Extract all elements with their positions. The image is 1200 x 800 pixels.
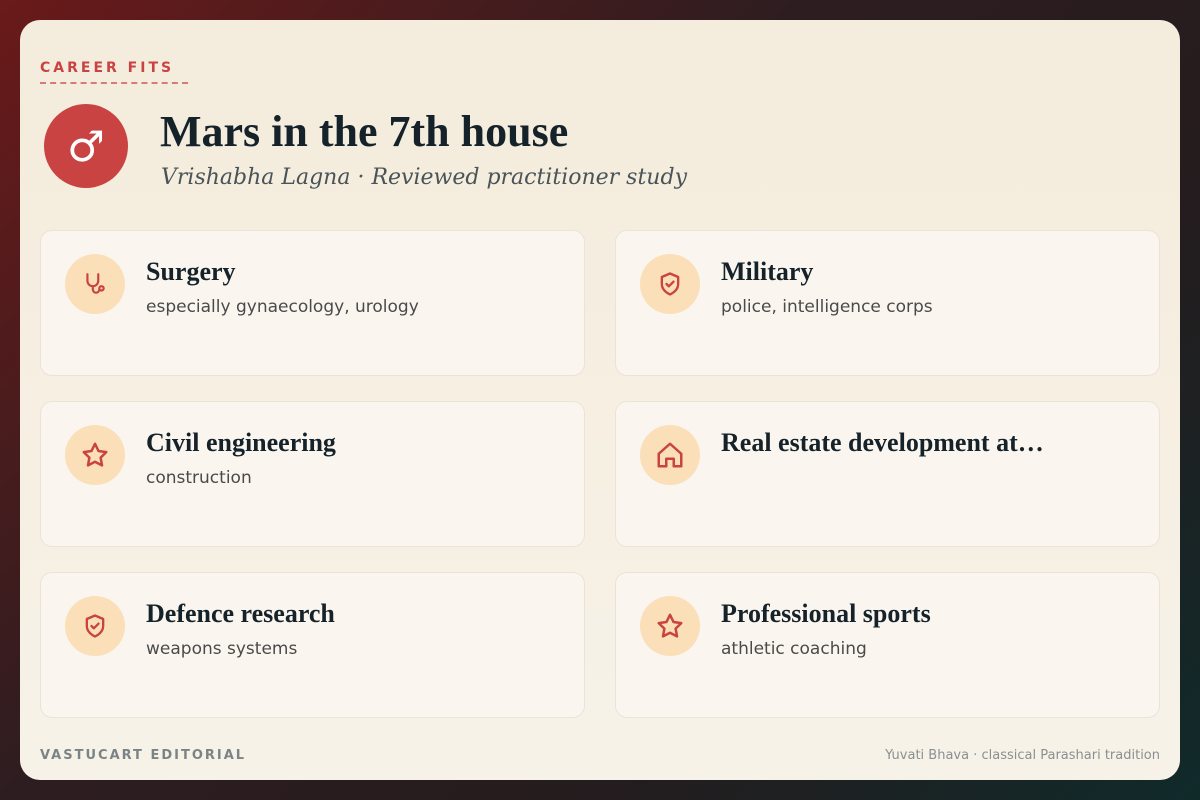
panel: professional sports: [615, 572, 1160, 718]
panel: defence research: Defence research: [146, 599, 335, 628]
panel: civil engineering: Civil engineering: [146, 428, 336, 457]
panel: military: police, intelligence corps: [721, 297, 933, 317]
panel: military: Military: [721, 257, 813, 286]
footer right: Yuvati Bhava · classical Parashari tradition: [885, 748, 1160, 763]
panel: surgery: [40, 230, 585, 376]
title: Mars in the 7th house: [160, 107, 568, 156]
icon: star: [640, 596, 700, 656]
panel: surgery: especially gynaecology, urology: [146, 297, 419, 317]
eyebrow label: [40, 60, 188, 84]
panel: defence research: weapons systems: [146, 639, 297, 659]
icon: house: [640, 425, 700, 485]
icon: shield: [640, 254, 700, 314]
panel: surgery: Surgery: [146, 257, 236, 286]
panel: civil engineering: construction: [146, 468, 252, 488]
footer left: VASTUCART EDITORIAL: [40, 748, 246, 763]
icon: stethoscope: [65, 254, 125, 314]
icon: mars symbol: ♂: [67, 122, 105, 170]
eyebrow label: CAREER FITS: [40, 60, 174, 76]
panel: professional sports: Professional sports: [721, 599, 931, 628]
icon: shield: [65, 596, 125, 656]
icon: star: [65, 425, 125, 485]
panel: real estate: [615, 401, 1160, 547]
panel: military: [615, 230, 1160, 376]
panel: defence research: [40, 572, 585, 718]
subtitle: Vrishabha Lagna · Reviewed practitioner study: [161, 165, 687, 190]
panel: professional sports: athletic coaching: [721, 639, 867, 659]
panel: civil engineering: [40, 401, 585, 547]
panel: real estate: Real estate development at…: [721, 428, 1044, 457]
icon: mars symbol: [44, 104, 128, 188]
